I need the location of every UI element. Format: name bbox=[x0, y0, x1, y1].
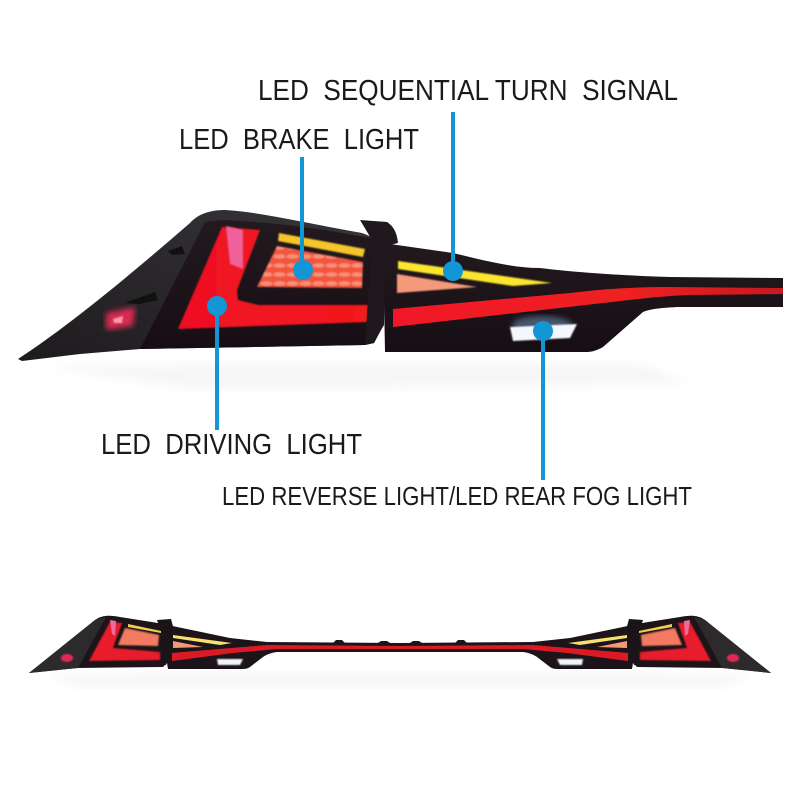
callout line and dot: driving light bbox=[207, 296, 227, 430]
driving light red area bbox=[178, 227, 368, 329]
label: sequential turn signal: LED SEQUENTIAL TURN SIGNAL bbox=[258, 75, 678, 107]
left white light bbox=[217, 659, 243, 665]
left side marker bbox=[61, 654, 73, 662]
white light glow bbox=[512, 316, 572, 334]
label: reverse and rear fog light: LED REVERSE LIGHT/LED REAR FOG LIGHT bbox=[222, 481, 692, 511]
left salmon wedge bbox=[173, 641, 203, 648]
right half of light bar bbox=[400, 616, 771, 673]
main tail light: outer section bbox=[18, 210, 382, 361]
inner dark housing bbox=[140, 220, 382, 349]
brake light LED array bbox=[257, 246, 363, 288]
label: driving light: LED DRIVING LIGHT bbox=[101, 429, 362, 461]
white reverse light bbox=[510, 324, 577, 341]
left amber bar bbox=[128, 624, 161, 633]
left body bbox=[29, 616, 400, 673]
floor reflection under main lamp bbox=[40, 362, 690, 390]
callout line and dot: reverse and fog light bbox=[533, 321, 553, 480]
side marker bbox=[106, 307, 135, 330]
turn signal amber bar bbox=[398, 261, 552, 286]
left half of light bar bbox=[29, 616, 400, 673]
label: brake light: LED BRAKE LIGHT bbox=[179, 124, 419, 156]
left bracket bbox=[157, 619, 174, 665]
brake light amber bar bbox=[278, 233, 365, 257]
left brake LEDs bbox=[118, 628, 159, 646]
main tail light: inner section bbox=[360, 220, 783, 352]
callout line and dot: brake light bbox=[293, 157, 313, 280]
salmon LED wedge bbox=[397, 274, 477, 293]
pink reflection bbox=[226, 226, 243, 269]
mounting bracket bbox=[360, 220, 398, 345]
red light strip bbox=[393, 287, 783, 327]
left wedge bbox=[29, 617, 106, 673]
outer section body bbox=[18, 210, 382, 361]
floor reflection under full light bar bbox=[45, 672, 755, 688]
left trim bumps bbox=[333, 640, 390, 643]
left turn signal bar bbox=[173, 635, 232, 645]
callout line and dot: sequential turn signal bbox=[443, 112, 463, 281]
left red strip bbox=[172, 645, 400, 661]
full light bar assembly bbox=[29, 616, 771, 673]
left driving light bbox=[89, 622, 160, 661]
trim notches bbox=[125, 246, 185, 304]
left pink reflection bbox=[110, 620, 116, 636]
inner section body bbox=[383, 243, 783, 352]
